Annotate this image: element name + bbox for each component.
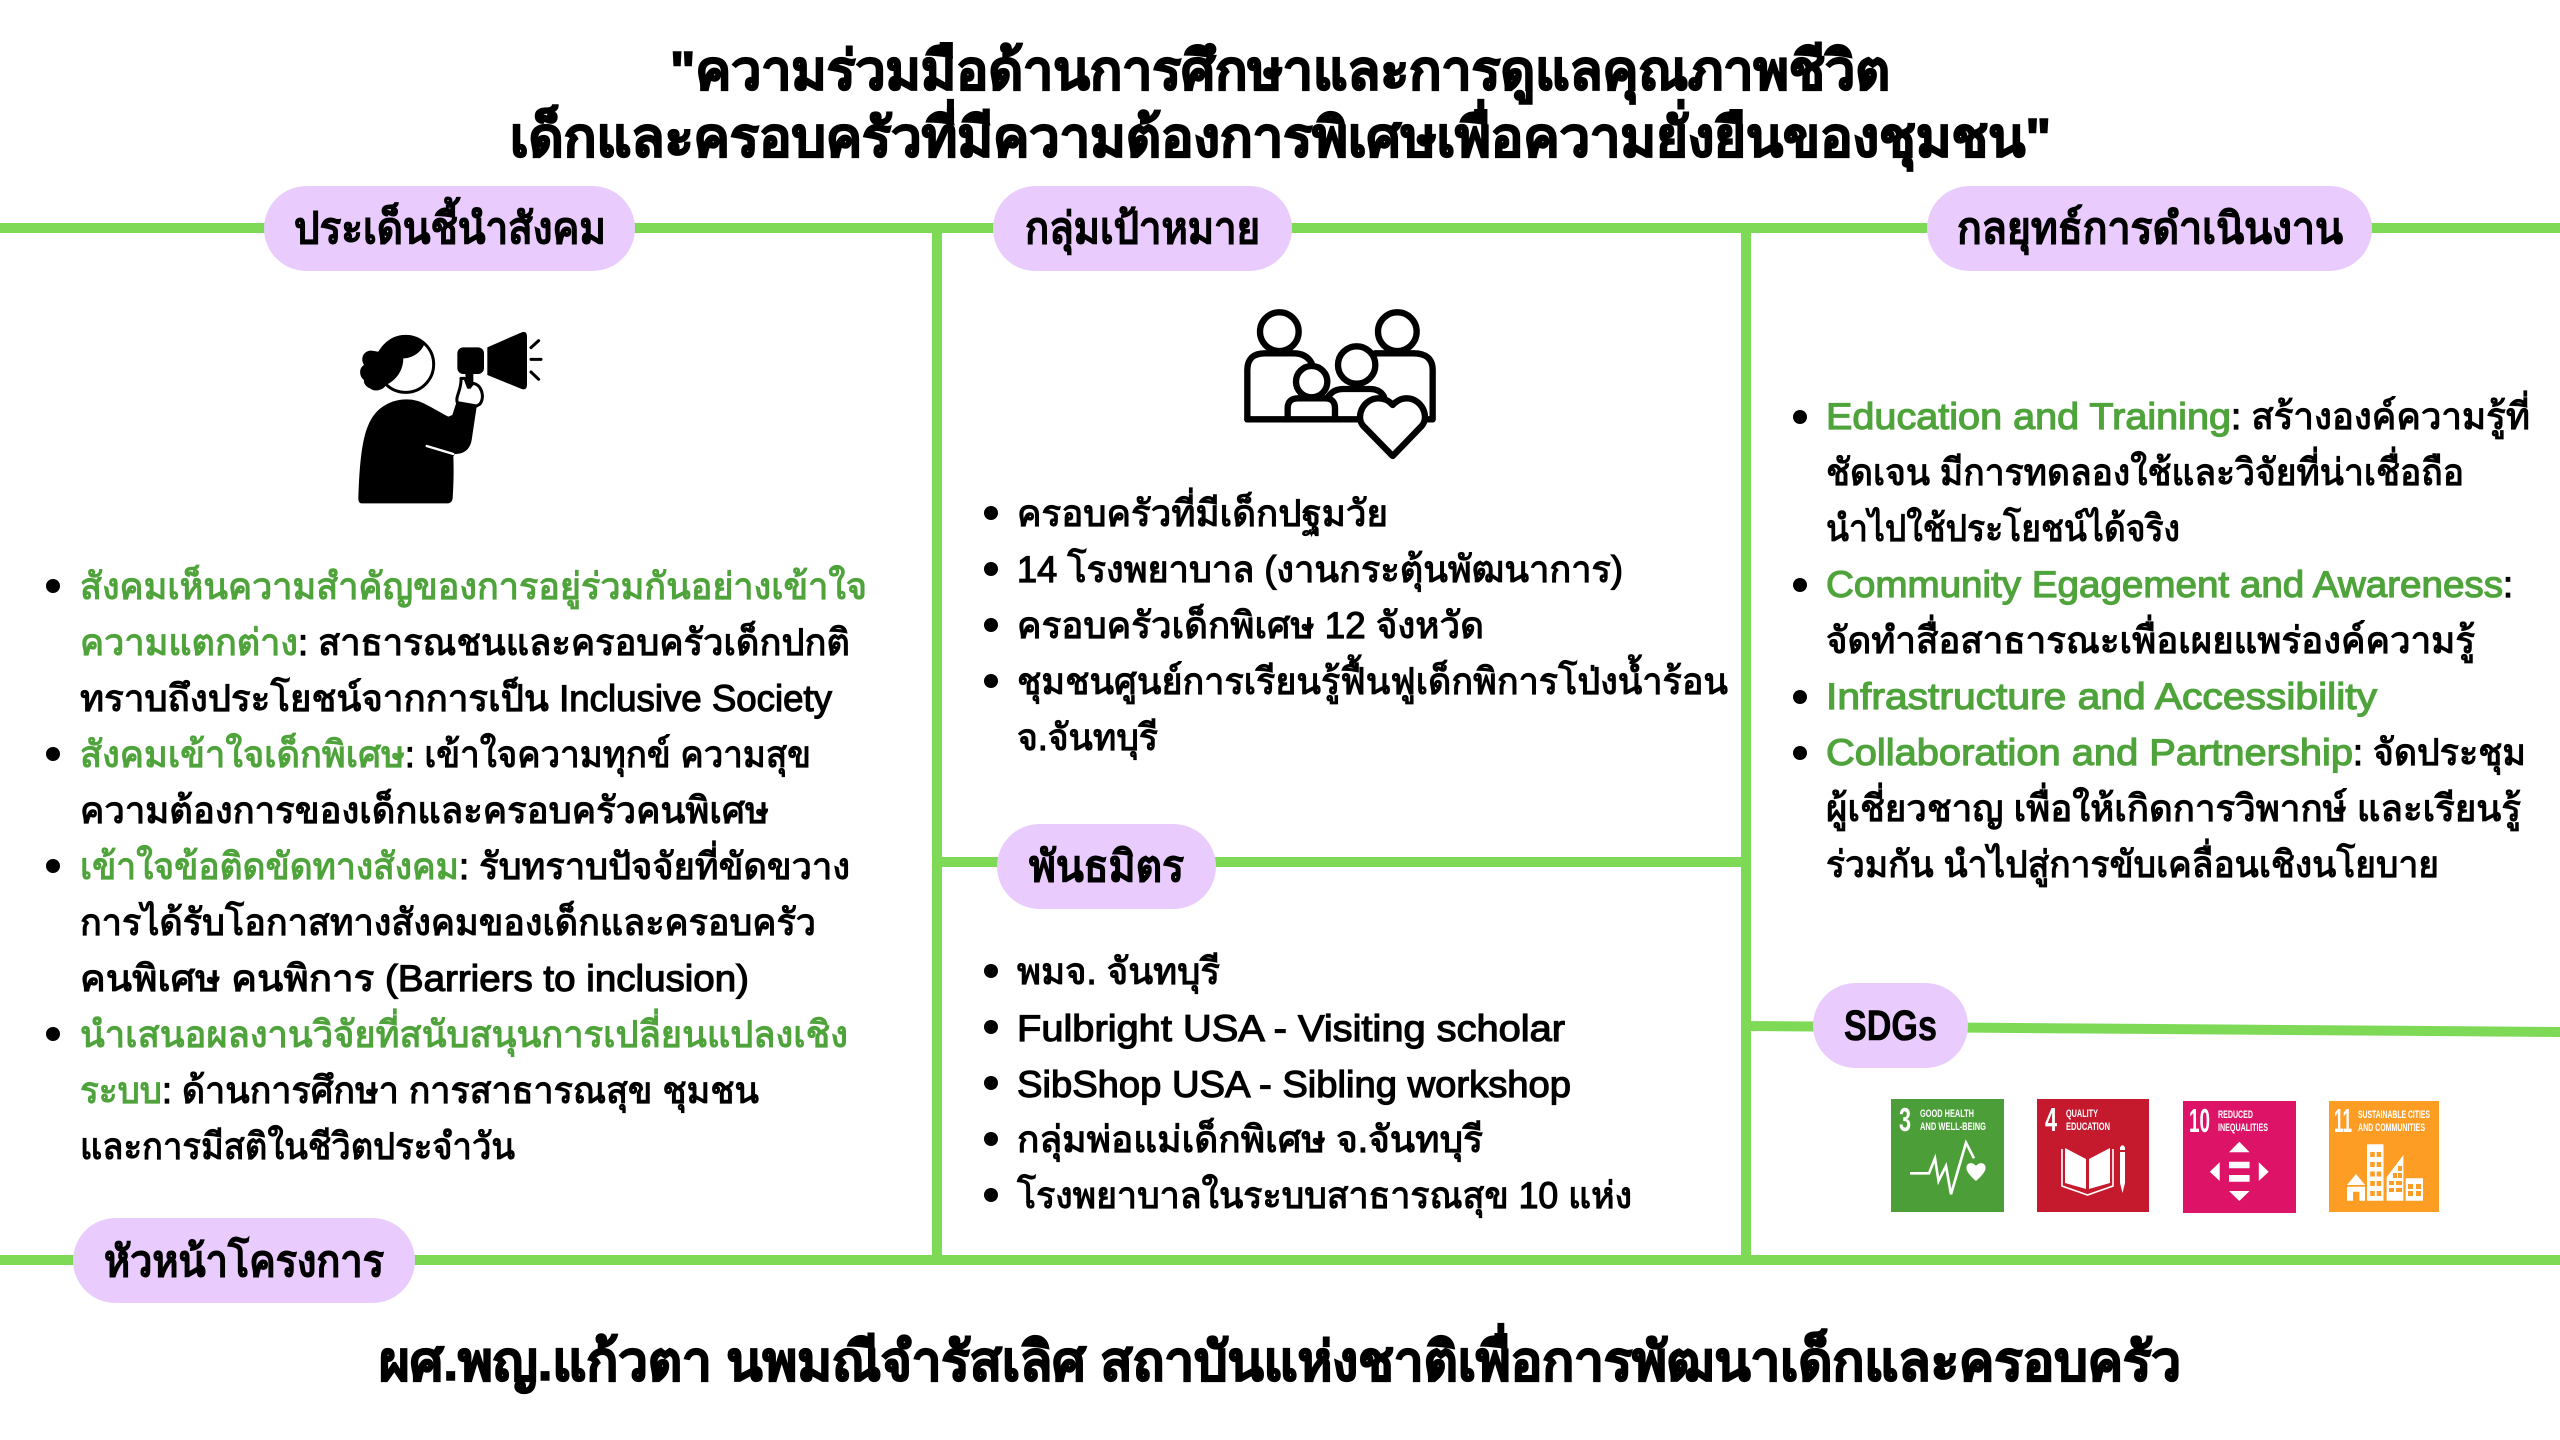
panel: partners bbox=[984, 824, 1632, 1218]
item: community engagement: Community Egagement and Awareness bbox=[1826, 564, 2503, 605]
heading: strategy: กลยุทธ์การดำเนินงาน bbox=[1957, 204, 2344, 256]
bullet list: target groups: ชุมชนศูนย์การเรียนรู้ฟื้นฟูเด็กพิการโป่งน้ำร้อน bbox=[1017, 654, 1728, 704]
heading: project lead bbox=[73, 1218, 415, 1303]
bullet list: target groups: ครอบครัวเด็กพิเศษ 12 จังหวัด bbox=[1017, 602, 1484, 646]
item: social barriers: คนพิเศษ คนพิการ (Barriers to inclusion) bbox=[80, 958, 749, 999]
item: community engagement bbox=[1793, 564, 2513, 663]
panel: target groups bbox=[984, 186, 1728, 760]
item: understand special children: สังคมเข้าใจเด็กพิเศษ bbox=[80, 731, 405, 775]
item: understand special children: ความต้องการของเด็กและครอบครัวคนพิเศษ bbox=[80, 787, 769, 831]
heading: social agenda: ประเด็นชี้นำสังคม bbox=[294, 196, 606, 253]
bullet list: strategy bbox=[1793, 390, 2530, 887]
bullet list: target groups: จ.จันทบุรี bbox=[1017, 717, 1158, 760]
item: understand special children: : เข้าใจความทุกข์ ความสุข bbox=[405, 733, 811, 777]
heading: SDGs: SDGs bbox=[1844, 1002, 1937, 1050]
icon: SDG 4: 4 bbox=[2045, 1101, 2057, 1138]
item: community engagement: จัดทำสื่อสาธารณะเพื่อเผยแพร่องค์ความรู้ bbox=[1826, 614, 2475, 663]
bullet list: target groups: ครอบครัวที่มีเด็กปฐมวัย bbox=[1017, 487, 1388, 536]
item: value living together: ความแตกต่าง bbox=[80, 622, 298, 663]
panel: social agenda bbox=[46, 186, 867, 1167]
panel: SDGs bbox=[1813, 983, 2439, 1213]
icon: family with heart bbox=[1247, 312, 1433, 456]
heading: target groups: กลุ่มเป้าหมาย bbox=[1025, 205, 1260, 256]
item: understand special children bbox=[46, 731, 811, 831]
item: research for systems change: ระบบ bbox=[80, 1070, 162, 1111]
icon: SDG 4 bbox=[2037, 1099, 2149, 1212]
icon: SDG 10: REDUCED bbox=[2218, 1109, 2253, 1121]
heading: strategy bbox=[1927, 186, 2372, 271]
bullet list: target groups bbox=[984, 487, 1728, 760]
icon: SDG 3: AND WELL-BEING bbox=[1920, 1121, 1986, 1133]
item: research for systems change: และการมีสติในชีวิตประจำวัน bbox=[80, 1125, 515, 1167]
icon: SDG 11: SUSTAINABLE CITIES bbox=[2358, 1109, 2430, 1121]
item: collaboration: ผู้เชี่ยวชาญ เพื่อให้เกิดการวิพากษ์ และเรียนรู้ bbox=[1826, 782, 2521, 831]
heading: partners bbox=[997, 824, 1216, 909]
item: education and training bbox=[1793, 390, 2530, 549]
title: เด็กและครอบครัวที่มีความต้องการพิเศษเพื่อความยั่งยืนของชุมชน" bbox=[510, 99, 2051, 172]
icon: SDG 11: AND COMMUNITIES bbox=[2358, 1122, 2425, 1134]
item: education and training: : สร้างองค์ความรู้ที่ bbox=[2231, 390, 2530, 439]
icon: SDG 4: QUALITY bbox=[2066, 1108, 2098, 1120]
bullet list: target groups: 14 โรงพยาบาล (งานกระตุ้นพัฒนาการ) bbox=[1017, 548, 1623, 592]
bullet list: partners: พมจ. จันทบุรี bbox=[1017, 951, 1220, 994]
icon: SDG 10: INEQUALITIES bbox=[2218, 1122, 2268, 1134]
item: collaboration: ร่วมกัน นำไปสู่การขับเคลื่อนเชิงนโยบาย bbox=[1826, 838, 2439, 887]
text: project lead name: ผศ.พญ.แก้วตา นพมณีจำรัสเลิศ สถาบันแห่งชาติเพื่อการพัฒนาเด็กและครอบครัว bbox=[379, 1323, 2181, 1393]
item: research for systems change: นำเสนอผลงานวิจัยที่สนับสนุนการเปลี่ยนแปลงเชิง bbox=[80, 1008, 848, 1057]
panel: project lead bbox=[73, 1218, 2181, 1393]
heading: SDGs bbox=[1813, 983, 1968, 1068]
panel: strategy bbox=[1793, 186, 2530, 887]
bullet list: social agenda bbox=[46, 563, 867, 1167]
title bbox=[510, 41, 2051, 172]
item: research for systems change bbox=[46, 1008, 848, 1167]
item: collaboration: : จัดประชุม bbox=[2353, 732, 2526, 775]
icon: SDG 3: 3 bbox=[1899, 1101, 1911, 1138]
item: social barriers: : รับทราบปัจจัยที่ขัดขวาง bbox=[459, 840, 850, 887]
icon: SDG 4: EDUCATION bbox=[2066, 1121, 2110, 1133]
item: community engagement: : bbox=[2503, 564, 2513, 605]
icon: SDG 3: GOOD HEALTH bbox=[1920, 1108, 1974, 1120]
item: education and training: นำไปใช้ประโยชน์ได้จริง bbox=[1826, 507, 2180, 549]
bullet list: partners: SibShop USA - Sibling workshop bbox=[1017, 1064, 1571, 1105]
heading: project lead: หัวหน้าโครงการ bbox=[104, 1235, 384, 1286]
bullet list: partners: กลุ่มพ่อแม่เด็กพิเศษ จ.จันทบุรี bbox=[1017, 1116, 1483, 1162]
item: value living together: สังคมเห็นความสำคัญของการอยู่ร่วมกันอย่างเข้าใจ bbox=[80, 563, 867, 609]
item: social barriers: การได้รับโอกาสทางสังคมของเด็กและครอบครัว bbox=[80, 899, 816, 943]
icon: SDG 10 bbox=[2183, 1101, 2296, 1213]
item: value living together bbox=[46, 563, 867, 719]
item: value living together: ทราบถึงประโยชน์จากการเป็น Inclusive Society bbox=[80, 675, 832, 719]
heading: partners: พันธมิตร bbox=[1029, 843, 1184, 891]
icon: SDG 11 bbox=[2329, 1101, 2439, 1212]
item: infrastructure: Infrastructure and Accessibility bbox=[1826, 676, 2378, 717]
icon: SDG 10: 10 bbox=[2189, 1102, 2210, 1139]
bullet list: partners bbox=[984, 951, 1632, 1218]
bullet list: partners: Fulbright USA - Visiting scholar bbox=[1017, 1008, 1565, 1049]
title: "ความร่วมมือด้านการศึกษาและการดูแลคุณภาพชีวิต bbox=[670, 41, 1890, 105]
bullet list: partners: โรงพยาบาลในระบบสาธารณสุข 10 แห่ง bbox=[1017, 1174, 1632, 1218]
item: collaboration: Collaboration and Partnership bbox=[1826, 732, 2353, 773]
item: research for systems change: : ด้านการศึกษา การสาธารณสุข ชุมชน bbox=[162, 1070, 759, 1113]
item: education and training: Education and Training bbox=[1826, 396, 2231, 437]
icon: SDG 11: 11 bbox=[2334, 1102, 2352, 1139]
icon: woman with megaphone bbox=[358, 332, 541, 503]
item: social barriers bbox=[46, 840, 850, 999]
item: social barriers: เข้าใจข้อติดขัดทางสังคม bbox=[80, 845, 459, 887]
item: value living together: : สาธารณชนและครอบครัวเด็กปกติ bbox=[298, 619, 850, 663]
heading: target groups bbox=[993, 186, 1292, 271]
icon: SDG 3 bbox=[1891, 1099, 2004, 1212]
item: education and training: ชัดเจน มีการทดลองใช้และวิจัยที่น่าเชื่อถือ bbox=[1826, 446, 2464, 493]
item: collaboration bbox=[1793, 732, 2526, 887]
heading: social agenda bbox=[264, 186, 635, 271]
